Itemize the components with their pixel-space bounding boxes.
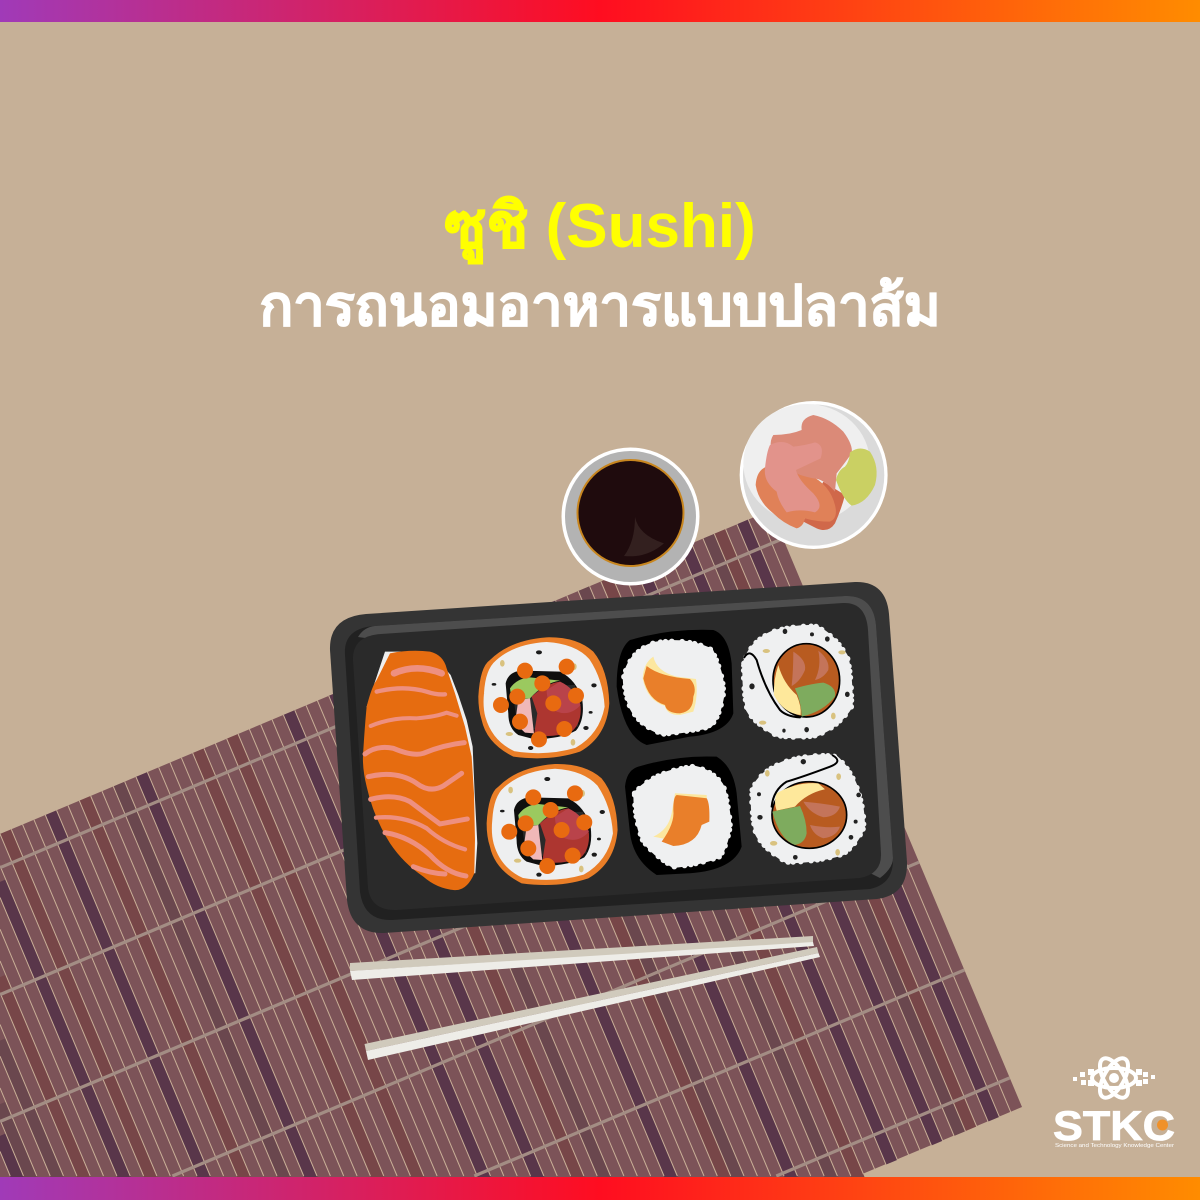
pickled ginger (756, 415, 852, 530)
spicy roe roll, top (478, 637, 609, 758)
wasabi (836, 448, 877, 506)
STKC logo (1053, 1054, 1175, 1149)
chopstick, upper (350, 936, 814, 980)
bento tray (330, 582, 907, 933)
chopstick, lower (364, 947, 820, 1060)
logo wordmark: STKC (1053, 1102, 1175, 1149)
uramaki roll, bottom (752, 755, 864, 862)
ginger and wasabi plate (740, 401, 888, 549)
logo tagline: Science and Technology Knowledge Center (1055, 1143, 1174, 1149)
bottom gradient bar (0, 1177, 1200, 1200)
logo atom mark (1073, 1054, 1155, 1102)
top gradient bar (0, 0, 1200, 22)
uramaki roll, top (744, 626, 851, 737)
bamboo mat (0, 510, 1022, 1180)
salmon nigiri (363, 651, 477, 890)
subtitle: fish preservation: การถนอมอาหารแบบปลาส้ม (259, 274, 941, 337)
logo orange dot (1157, 1120, 1168, 1130)
spicy roe roll, bottom (487, 764, 618, 885)
hosomaki roll, top (617, 630, 733, 745)
title: sushi: ซูชิ (Sushi) (444, 192, 756, 264)
hosomaki roll, bottom (625, 756, 742, 875)
soy sauce dish (562, 448, 700, 586)
